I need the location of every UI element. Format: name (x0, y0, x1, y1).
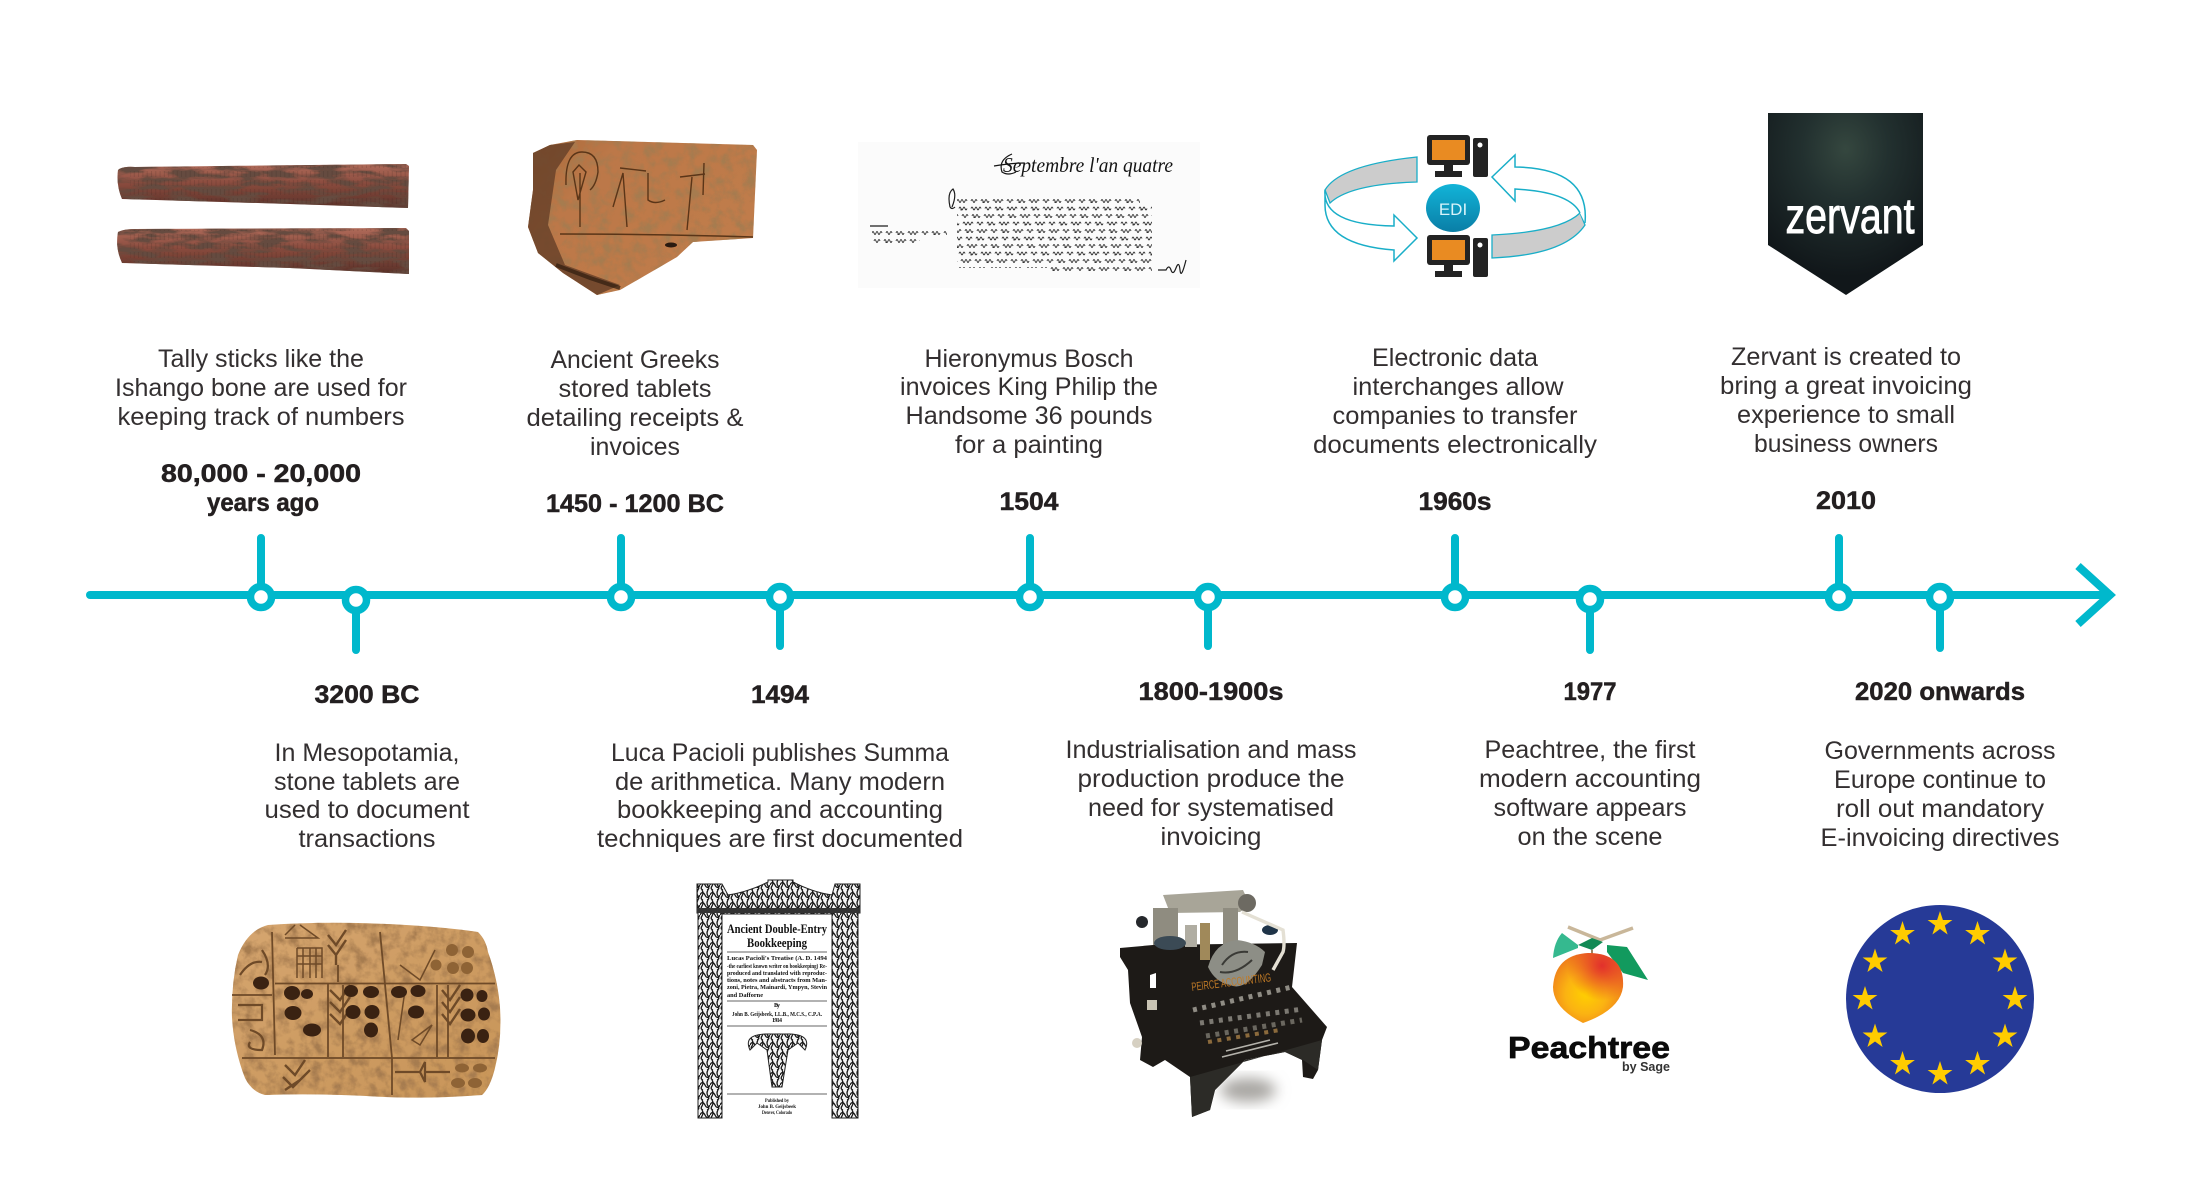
date (161, 460, 361, 517)
description: Ancient Greeks (550, 346, 720, 374)
icon: clay tablet (528, 140, 757, 295)
icon: handwritten manuscript: Septembre l'an quatre (1003, 153, 1173, 177)
arrow head (2078, 566, 2110, 624)
icon: book title page: tions, notes and abstracts from Man- (727, 977, 827, 984)
carriage (1136, 890, 1284, 970)
description: modern accounting (1479, 765, 1701, 793)
description: companies to transfer (1332, 402, 1578, 430)
icon: book title page: zoni, Pietra, Mainardi, Ympyn, Stevin (727, 984, 827, 991)
date: 80,000 - 20,000 (161, 460, 361, 488)
keyboard (1193, 987, 1303, 1042)
timeline axis (90, 591, 2108, 599)
description: business owners (1754, 430, 1938, 458)
date: 1450 - 1200 BC (546, 490, 724, 518)
panel: electronic data interchange (1313, 135, 1598, 516)
type basket (1208, 940, 1265, 986)
description: experience to small (1737, 401, 1955, 429)
description (597, 739, 963, 853)
description: transactions (298, 825, 436, 853)
description: Industrialisation and mass (1066, 736, 1356, 764)
icon: book title page: Denver, Colorado (762, 1110, 792, 1116)
icon: typewriter: PEIRCE ACCOUNTING (1191, 970, 1272, 994)
icon: EDI diagram: EDI (1439, 200, 1467, 219)
date: 1494 (751, 681, 809, 709)
panel: Luca Pacioli (597, 681, 963, 1118)
icon: EU flag (1846, 905, 2034, 1093)
description: In Mesopotamia, (274, 739, 460, 767)
panel: Peachtree (1479, 678, 1701, 1074)
panel: European e-invoicing (1820, 678, 2060, 1093)
icon: book title page: John B. Geijsbeek, LL.B., M.C.S., C.P.A. (732, 1012, 822, 1018)
description: Europe continue to (1834, 766, 2046, 794)
description: stone tablets are (274, 768, 460, 796)
description: Luca Pacioli publishes Summa (611, 739, 949, 767)
description: software appears (1494, 794, 1686, 822)
marker ticks (261, 538, 1940, 650)
description (1066, 736, 1356, 851)
description: invoices (590, 433, 680, 461)
description: invoicing (1160, 823, 1262, 851)
icon: book title page: By (774, 1003, 780, 1009)
icon: Peachtree logo (1508, 927, 1670, 1074)
icon: book title page: -the earliest known writer on bookkeeping) Re- (727, 963, 827, 970)
date: 1800-1900s (1138, 678, 1284, 706)
description: for a painting (955, 431, 1103, 459)
description: invoices King Philip the (900, 373, 1158, 401)
description: documents electronically (1313, 431, 1598, 459)
description: bring a great invoicing (1720, 372, 1972, 400)
description: de arithmetica. Many modern (615, 768, 945, 796)
description: Hieronymus Bosch (924, 345, 1134, 373)
icon: zervant shield logo (1768, 113, 1923, 295)
panel: Zervant (1720, 113, 1972, 515)
description: bookkeeping and accounting (617, 796, 943, 824)
icon: book title page: Published by (765, 1098, 789, 1104)
description: Peachtree, the first (1484, 736, 1696, 764)
date: 2010 (1816, 487, 1876, 515)
date: 1504 (1000, 488, 1059, 516)
description: stored tablets (558, 375, 712, 403)
panel: ancient greek tablet (526, 140, 757, 518)
description: Handsome 36 pounds (906, 402, 1152, 430)
panel: tally sticks (115, 164, 409, 517)
description (900, 345, 1158, 459)
description (1720, 343, 1972, 458)
icon: cuneiform tablet (232, 923, 500, 1098)
icon: book title page: and Dafforne (727, 992, 763, 999)
description: used to document (264, 796, 470, 824)
icon: EDI diagram (1325, 135, 1585, 277)
description: techniques are first documented (597, 825, 963, 853)
timeline (90, 538, 2110, 650)
icon: book title page: produced and translated with reproduc- (727, 970, 827, 977)
panel: Hieronymus Bosch invoice (870, 154, 1187, 510)
panel: industrialisation (1066, 678, 1356, 1117)
marker circles (250, 586, 1950, 610)
date: 3200 BC (314, 681, 420, 709)
description (1313, 344, 1598, 459)
description: need for systematised (1088, 794, 1334, 822)
date: 2020 onwards (1855, 678, 2025, 706)
description: Tally sticks like the (158, 345, 364, 373)
description: production produce the (1078, 765, 1344, 793)
icon: book title page: John B. Geijsbeek (758, 1104, 797, 1110)
icon: zervant shield logo: zervant (1786, 188, 1915, 244)
icon: book title page: 1914 (772, 1018, 782, 1024)
description (1820, 737, 2060, 852)
date: 1960s (1418, 488, 1492, 516)
icon: book title page: Lucas Pacioli's Treatise (A. D. 1494 (727, 955, 828, 962)
description: E-invoicing directives (1820, 824, 2060, 852)
description (264, 739, 470, 853)
icon: book title page: Bookkeeping (747, 935, 807, 950)
frame and legs (1120, 943, 1327, 1117)
icon: tally sticks (117, 164, 409, 274)
description: Governments across (1824, 737, 2056, 765)
date: 1977 (1564, 678, 1616, 706)
description: Ishango bone are used for (115, 374, 407, 402)
icon: book title page: Ancient Double-Entry (727, 921, 827, 936)
description: interchanges allow (1352, 373, 1564, 401)
icon: book title page (697, 880, 860, 1118)
description: keeping track of numbers (118, 403, 405, 431)
date: years ago (207, 489, 319, 517)
description: on the scene (1518, 823, 1662, 851)
description (115, 345, 407, 431)
description: Zervant is created to (1731, 343, 1961, 371)
icon: typewriter (1120, 890, 1327, 1117)
description: detailing receipts & (526, 404, 744, 432)
description: roll out mandatory (1836, 795, 2045, 823)
icon: handwritten manuscript (870, 154, 1187, 274)
description (1479, 736, 1701, 851)
description: Electronic data (1372, 344, 1538, 372)
description (526, 346, 744, 461)
panel: Mesopotamia (232, 681, 500, 1098)
icon: Peachtree logo: by Sage (1622, 1059, 1670, 1074)
icon: Peachtree logo: Peachtree (1508, 1030, 1670, 1065)
